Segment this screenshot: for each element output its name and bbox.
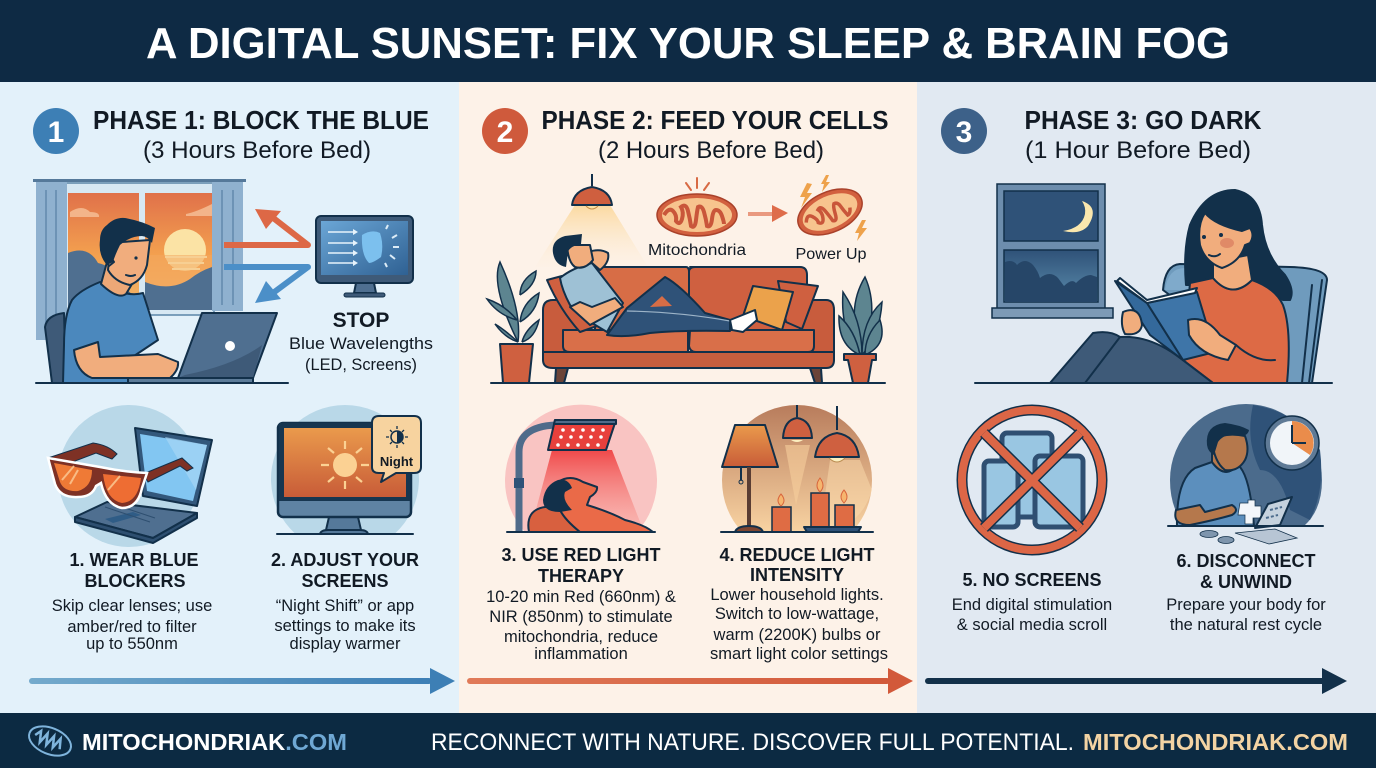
panel: phase 1 background (0, 82, 459, 713)
label: mitochondria: Mitochondria (648, 242, 746, 259)
icon: no screens (962, 410, 1102, 550)
icon: puzzle and clock (1168, 404, 1323, 544)
step 6 description (1166, 596, 1326, 634)
step 4 description (710, 586, 888, 663)
icon: warm low lights and candles (721, 405, 873, 532)
icon: blue-blocker glasses on laptop (48, 405, 212, 547)
step 6 heading: 6. DISCONNECT (1176, 551, 1316, 571)
step 4 heading: 4. REDUCE LIGHT (719, 545, 875, 565)
arrow: phase 1 timeline (29, 668, 455, 694)
text: stop blue wavelengths: STOP (333, 309, 389, 332)
step 3 description: mitochondria, reduce (504, 628, 658, 646)
icon: warm monitor with night shift: Night (380, 454, 414, 469)
phase 2 heading: PHASE 2: FEED YOUR CELLS (542, 107, 888, 135)
step 2 description (274, 597, 416, 653)
step 4 description: Lower household lights. (710, 586, 884, 604)
phase 1 number badge (33, 108, 79, 154)
step 4 heading (719, 545, 875, 585)
logo: mitochondrion (25, 721, 75, 761)
arrow: phase 2 timeline (467, 668, 913, 694)
step 3 description: NIR (850nm) to stimulate (489, 608, 673, 626)
icon: red light therapy (505, 405, 657, 532)
illustration: man at laptop by sunset window (33, 179, 288, 383)
step 6 heading (1176, 551, 1316, 592)
brand name: MITOCHONDRIAK.COM (82, 729, 347, 755)
title: A DIGITAL SUNSET: FIX YOUR SLEEP & BRAIN FOG (146, 19, 1230, 68)
step 2 heading: SCREENS (301, 571, 389, 591)
step 1 description (52, 597, 212, 653)
step 1 heading (69, 550, 199, 591)
step 3 heading: 3. USE RED LIGHT (501, 545, 661, 565)
step 3 heading: THERAPY (538, 566, 624, 586)
panel: phase 3 (925, 107, 1347, 694)
step 4 description: smart light color settings (710, 645, 888, 663)
step 5 description: & social media scroll (957, 616, 1107, 634)
phase 2 number badge (482, 108, 528, 154)
phase 1 timing: (3 Hours Before Bed) (143, 137, 371, 164)
step 2 description: “Night Shift” or app (276, 597, 414, 615)
step 2 description: settings to make its (274, 617, 416, 635)
phase 3 number badge (941, 108, 987, 154)
step 5 description (952, 596, 1112, 634)
icon: powered-up mitochondria (791, 175, 869, 244)
phase 2 timing: (2 Hours Before Bed) (598, 137, 824, 164)
step 1 description: up to 550nm (86, 635, 178, 653)
step 2 heading: 2. ADJUST YOUR (271, 550, 419, 570)
arrows: red and blue reflected light (224, 209, 308, 303)
icon: monitor emitting blue light (316, 216, 413, 297)
label: power up: Power Up (796, 246, 867, 263)
phase 1 number badge: 1 (48, 116, 64, 149)
phase 3 timing: (1 Hour Before Bed) (1025, 137, 1251, 164)
illustration: man resting on sofa under lamp (487, 174, 885, 383)
phase 3 heading: PHASE 3: GO DARK (1024, 107, 1262, 135)
step 4 heading: INTENSITY (750, 565, 844, 585)
step 3 description: 10-20 min Red (660nm) & (486, 588, 676, 606)
step 6 description: Prepare your body for (1166, 596, 1326, 614)
panel: phase 2 background (459, 82, 917, 713)
cushions (778, 281, 818, 329)
website link text: MITOCHONDRIAK.COM (1083, 729, 1348, 755)
arrow: to power up (748, 205, 788, 222)
phase 1 heading: PHASE 1: BLOCK THE BLUE (93, 107, 429, 135)
step 3 description (486, 588, 676, 663)
header (0, 0, 1376, 82)
panel: phase 3 background (917, 82, 1376, 713)
step 2 heading (271, 550, 419, 591)
panel: phase 1 (29, 107, 455, 694)
step 6 heading: & UNWIND (1200, 572, 1292, 592)
illustration: woman reading in chair (975, 190, 1332, 383)
plant left (500, 344, 533, 383)
footer (0, 713, 1376, 768)
icon: warm monitor with night shift (271, 405, 421, 534)
step 2 description: display warmer (290, 635, 401, 653)
step 3 heading (501, 545, 661, 586)
phase 2 number badge: 2 (497, 116, 513, 149)
slogan: RECONNECT WITH NATURE. DISCOVER FULL POTENTIAL. (431, 729, 1074, 756)
text: stop blue wavelengths: (LED, Screens) (305, 355, 417, 374)
illustration: night window (992, 184, 1113, 318)
step 5 description: End digital stimulation (952, 596, 1112, 614)
step 6 description: the natural rest cycle (1170, 616, 1322, 634)
sofa (595, 267, 689, 345)
plant right (839, 277, 882, 355)
step 1 description: amber/red to filter (67, 618, 197, 636)
step 1 description: Skip clear lenses; use (52, 597, 212, 615)
step 4 description: Switch to low-wattage, (715, 605, 879, 623)
panel: phase 2 (467, 107, 913, 694)
step 4 description: warm (2200K) bulbs or (713, 626, 881, 644)
text: stop blue wavelengths (289, 309, 433, 374)
step 1 heading: BLOCKERS (84, 571, 186, 591)
phase 3 number badge: 3 (956, 116, 972, 149)
icon: mitochondria (657, 178, 737, 236)
man (547, 276, 600, 332)
step 1 heading: 1. WEAR BLUE (69, 550, 199, 570)
arrow: phase 3 timeline (925, 668, 1347, 694)
text: stop blue wavelengths: Blue Wavelengths (289, 334, 433, 353)
step 3 description: inflammation (534, 645, 628, 663)
step 5 heading: 5. NO SCREENS (962, 570, 1102, 590)
